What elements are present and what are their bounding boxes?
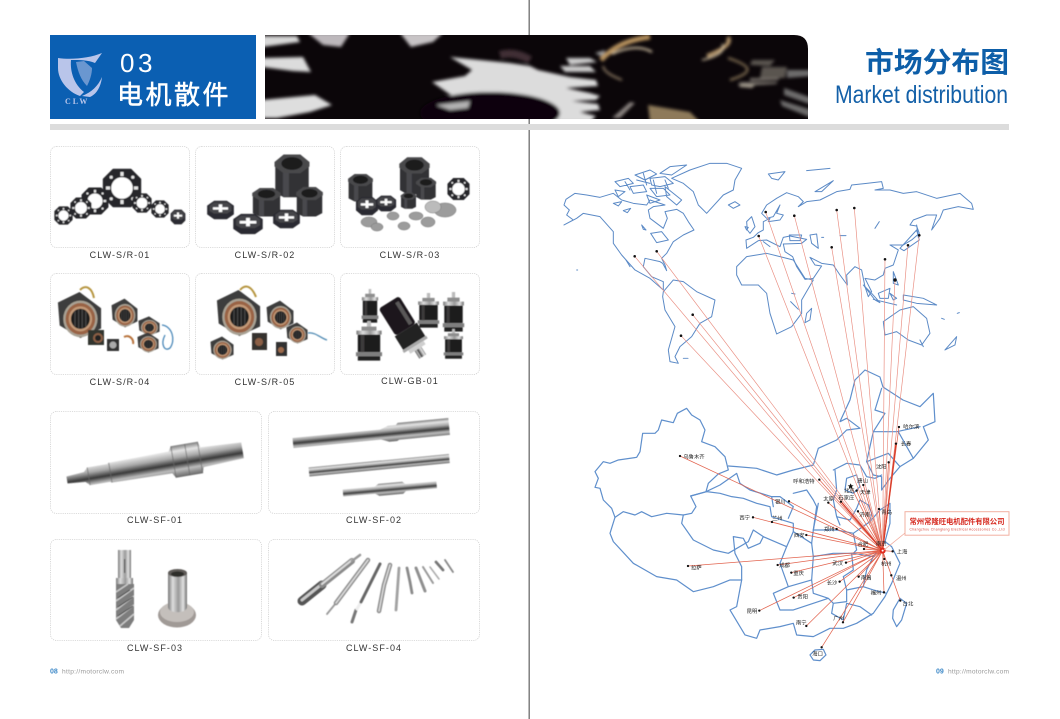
centre fold line [528, 0, 530, 719]
Central provinces [730, 532, 900, 638]
China city markers and labels: 唐山 [857, 477, 868, 485]
product card: CLW-GB-01: CLW-GB-01 [381, 376, 439, 386]
section name: 电机散件 [117, 80, 231, 110]
heading: market distribution English: Market distribution [835, 81, 1008, 109]
world map outline [564, 163, 973, 363]
China city markers and labels: 西宁 [739, 513, 750, 521]
China city markers and labels: 昆明 [747, 608, 757, 615]
China city markers and labels: 太原 [823, 494, 835, 502]
callout: company name: 常州常隆旺电机配件有限公司 [910, 517, 1004, 526]
China city markers and labels: 沈阳 [876, 462, 887, 470]
Arctic Canada [577, 165, 687, 270]
product card: CLW-GB-01 [340, 274, 480, 386]
China city markers and labels: 济南 [859, 511, 870, 519]
China city markers and labels: 广州 [833, 614, 844, 622]
Eurasia [746, 182, 973, 297]
Xinjiang [595, 408, 728, 517]
footer: right page number and url: http://motorclw.com [948, 668, 1010, 676]
product card: CLW-S/R-02: CLW-S/R-02 [235, 250, 295, 260]
China city markers and labels: 长沙 [827, 579, 838, 587]
China city markers and labels: 成都 [779, 561, 791, 569]
icon: CLW logo: CLW [65, 97, 89, 106]
China city markers and labels: 乌鲁木齐 [683, 452, 705, 460]
product card: CLW-S/R-04 [50, 274, 190, 387]
header: blue section title block [50, 35, 256, 119]
Hainan and Taiwan [810, 598, 907, 661]
South America [663, 280, 715, 363]
Greenland [672, 163, 742, 213]
Iceland and UK [728, 202, 755, 233]
Africa [737, 253, 813, 334]
North America [564, 193, 694, 290]
China city markers and labels: 上海 [897, 547, 908, 555]
product card: CLW-SF-04 [268, 540, 480, 653]
Japan, islands and Australasia [768, 168, 959, 350]
China city markers and labels: 南宁 [796, 619, 807, 627]
China city markers and labels: 重庆 [793, 569, 805, 577]
inland seas [763, 234, 846, 248]
product card: CLW-SF-01: CLW-SF-01 [127, 515, 183, 525]
Beijing, Hebei and Shanxi [813, 470, 890, 553]
product card: CLW-S/R-03 [340, 146, 480, 260]
grey header rule [50, 124, 1009, 130]
footer: left page number and url: 08 [50, 668, 58, 676]
distribution lines to Changzhou [635, 208, 919, 647]
product card: CLW-S/R-02 [196, 146, 334, 260]
footer: right page number and url: 09 [936, 668, 944, 676]
product card: CLW-S/R-05: CLW-S/R-05 [235, 377, 295, 387]
China city markers and labels: 长春 [901, 440, 912, 448]
product card: CLW-SF-04: CLW-SF-04 [346, 643, 402, 653]
heading: market distribution Chinese: 市场分布图 [865, 47, 1009, 78]
China city markers and labels: 台北 [903, 600, 914, 608]
China city markers and labels: 哈尔滨 [903, 423, 920, 431]
North East provinces [867, 427, 920, 467]
China city markers and labels: 青岛 [881, 508, 892, 516]
header: gear photo banner [265, 35, 808, 119]
product card: CLW-S/R-05 [196, 274, 334, 387]
Tibet [610, 515, 763, 592]
section number: 03 [120, 48, 156, 78]
footer: left page number and url: http://motorclw.com [62, 668, 124, 676]
China city markers and labels: 武汉 [832, 559, 844, 567]
China city markers and labels: 贵阳 [797, 593, 808, 601]
product card: CLW-S/R-03: CLW-S/R-03 [380, 250, 440, 260]
China map outline [595, 370, 935, 661]
product card: CLW-SF-01 [50, 412, 262, 525]
callout: company name [884, 512, 1009, 550]
China city markers and labels: 海口 [812, 650, 823, 658]
China city markers and labels: 南京 [876, 540, 887, 548]
China city markers and labels: 西安 [794, 531, 805, 539]
China city markers and labels: 郑州 [824, 525, 835, 533]
product card: CLW-S/R-01 [50, 146, 190, 260]
China city markers and labels: 呼和浩特 [793, 477, 815, 485]
product card: CLW-SF-02 [268, 412, 480, 525]
product card: CLW-SF-02: CLW-SF-02 [346, 515, 402, 525]
China city markers and labels: 天津 [860, 489, 871, 496]
callout: company name: Changzhou Changlong Electrical Accessories Co.,Ltd [910, 528, 1005, 532]
China city markers and labels: 拉萨 [691, 563, 702, 571]
China city markers and labels: 杭州 [881, 560, 892, 568]
product card: CLW-SF-03 [50, 540, 262, 653]
product card: CLW-SF-03: CLW-SF-03 [127, 643, 183, 653]
China city markers and labels: 石家庄 [838, 493, 855, 501]
world city markers [633, 207, 921, 337]
product card: CLW-S/R-04: CLW-S/R-04 [90, 377, 150, 387]
icon: CLW logo [58, 53, 102, 106]
China city markers and labels [679, 423, 920, 658]
Qinghai [691, 492, 793, 547]
China city markers and labels: 兰州 [772, 514, 783, 522]
China city markers and labels: 福州 [871, 588, 881, 596]
Inner Mongolia and Gansu [706, 370, 935, 543]
product card: CLW-S/R-01: CLW-S/R-01 [90, 250, 150, 260]
China city markers and labels: 南昌 [861, 573, 872, 581]
China city markers and labels: 温州 [896, 574, 907, 582]
China city markers and labels: 合肥 [858, 540, 869, 548]
China city markers and labels: 北京 [844, 486, 855, 494]
China city markers and labels: 银川 [775, 497, 786, 505]
